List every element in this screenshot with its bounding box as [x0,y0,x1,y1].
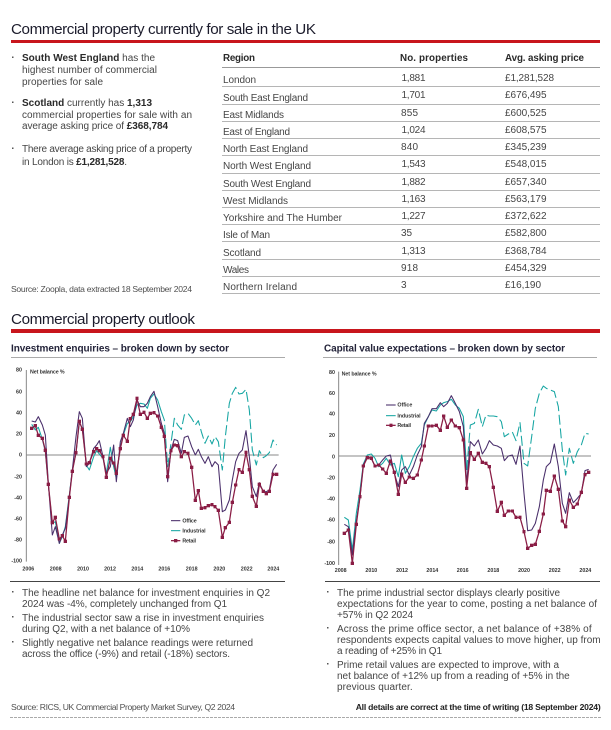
table: properties by region: Region [223,53,255,64]
line chart: investment enquiries: 2012 [104,566,116,572]
text block: for-sale key points: There average asking price of a property [22,144,192,155]
subheading: investment enquiries: Investment enquiries – broken down by sector [11,344,229,354]
line chart: investment enquiries: 2024 [267,566,279,572]
table: properties by region: 1,882 [402,177,426,188]
line chart: capital value expectations: 40 [329,412,335,418]
table: properties by region: £600,525 [505,108,547,119]
line chart: investment enquiries: -80 [14,538,22,544]
line chart: capital value expectations [324,370,591,574]
text block: investment enquiries commentary: Slightly negative net balance readings were returned [22,638,253,649]
line chart: investment enquiries: 2018 [186,566,198,572]
text block: capital value commentary: Prime retail values are expected to improve, with a [337,660,559,671]
line chart: investment enquiries: Industrial [182,528,206,534]
table: properties by region: Scotland [223,248,261,259]
table: properties by region: 35 [401,228,412,239]
table: properties by region: No. properties [400,53,469,64]
line chart: capital value expectations: 2012 [396,568,408,574]
disclaimer: All details are correct at the time of writing (18 September 2024) [356,702,601,712]
table: properties by region: 1,543 [402,159,426,170]
line chart: investment enquiries: Office [182,518,197,524]
line chart: investment enquiries: -20 [14,474,22,480]
text block: investment enquiries commentary: The headline net balance for investment enquiries in Q2 [22,588,270,599]
table: properties by region: £368,784 [505,246,547,257]
table: properties by region: Isle of Man [223,230,270,241]
table: properties by region: Wales [223,265,249,276]
subheading: capital value expectations: Capital value expectations – broken down by sector [324,344,565,354]
line chart: investment enquiries: 2014 [131,566,143,572]
line chart: capital value expectations: 2024 [579,568,591,574]
heading: commercial property outlook: Commercial property outlook [11,311,195,328]
text block: for-sale key points: highest number of commercial [22,65,157,76]
line chart: capital value expectations: -40 [327,496,335,502]
line chart: capital value expectations: 2010 [365,568,377,574]
text block: capital value commentary [327,588,601,693]
text block: capital value commentary: net balance of +12% up from a reading of +5% in the [337,671,570,682]
line chart: capital value expectations: Office [397,403,412,409]
table: properties by region: 3 [401,280,407,291]
text block: investment enquiries commentary: 2024 was -4%, completely unchanged from Q1 [22,599,227,610]
line chart: capital value expectations: 2020 [518,568,530,574]
table: properties by region: 1,227 [402,211,426,222]
line chart: investment enquiries: 80 [16,368,22,374]
line chart: investment enquiries: 2016 [158,566,170,572]
line chart: capital value expectations: 2018 [487,568,499,574]
line chart: capital value expectations: -100 [324,561,335,567]
table: properties by region [222,53,600,294]
line chart: capital value expectations: -80 [327,539,335,545]
line chart: capital value expectations: 2022 [549,568,561,574]
table: properties by region: £676,495 [505,90,547,101]
line chart: investment enquiries: 2008 [50,566,62,572]
table: properties by region: 840 [401,142,418,153]
table: properties by region: North West England [223,161,311,172]
line chart: capital value expectations: 2014 [426,568,438,574]
line chart: capital value expectations: Industrial [397,413,421,419]
table: properties by region: West Midlands [223,196,288,207]
text block: for-sale key points [12,53,192,168]
line chart: capital value expectations: -20 [327,475,335,481]
text block: capital value commentary: previous quarter. [337,682,413,693]
text block: investment enquiries commentary: during Q2, with a net balance of +10% [22,624,190,635]
line chart: capital value expectations: -60 [327,518,335,524]
line chart: investment enquiries: 2022 [241,566,253,572]
line chart: capital value expectations: 20 [329,433,335,439]
text block: capital value commentary: +57% in Q2 2024 [337,610,413,621]
line chart: investment enquiries: 2020 [213,566,225,572]
text block: capital value commentary: expectations for the year to come, posting a net balance of [337,599,597,610]
text block: for-sale key points: Scotland currently has 1,313 [22,98,152,109]
table: properties by region: £582,800 [505,228,547,239]
line chart: investment enquiries: 40 [16,410,22,416]
line chart: capital value expectations: 2008 [335,568,347,574]
table: properties by region: £548,015 [505,159,547,170]
table: properties by region: 1,024 [402,125,426,136]
source: RICS: Source: RICS, UK Commercial Property Market Survey, Q2 2024 [11,702,235,712]
table: properties by region: £16,190 [505,280,541,291]
table: properties by region: North East England [223,144,308,155]
text block: capital value commentary: respondents expects capital values to move higher, up from [337,635,601,646]
line chart: investment enquiries: -100 [11,558,22,564]
table: properties by region: Yorkshire and The Humber [223,213,343,224]
table: properties by region: £608,575 [505,125,547,136]
text block: investment enquiries commentary: across the office (-9%) and retail (-18%) sectors. [22,649,230,660]
line chart: capital value expectations: Retail [397,423,412,429]
table: properties by region: 918 [401,263,418,274]
line chart: investment enquiries: Retail [182,538,197,544]
table: properties by region: £563,179 [505,194,547,205]
line chart: investment enquiries: 60 [16,389,22,395]
table: properties by region: London [223,75,256,86]
table: properties by region: £454,329 [505,263,547,274]
line chart: investment enquiries: 20 [16,431,22,437]
line chart: capital value expectations: Net balance % [342,372,377,378]
title: commercial property for sale: Commercial property currently for sale in the UK [11,21,316,38]
table: properties by region: £657,340 [505,177,547,188]
line chart: capital value expectations: 60 [329,391,335,397]
text block: for-sale key points: properties for sale [22,77,103,88]
table: properties by region: £345,239 [505,142,547,153]
table: properties by region: 1,313 [402,246,426,257]
text block: capital value commentary: Across the prime office sector, a net balance of +38% of [337,624,592,635]
text block: for-sale key points: in London is £1,281,528. [22,157,127,168]
text block: for-sale key points: commercial properties for sale with an [22,110,192,121]
line chart: investment enquiries: 0 [19,453,22,459]
table: properties by region: Northern Ireland [223,282,297,293]
line chart: capital value expectations: 0 [332,454,335,460]
table: properties by region: 1,163 [402,194,426,205]
table: properties by region: 855 [401,108,418,119]
table: properties by region: South East England [223,93,308,104]
line chart: investment enquiries: 2010 [77,566,89,572]
text block: for-sale key points: South West England has the [22,53,155,64]
table: properties by region: East of England [223,127,290,138]
text block: capital value commentary: The prime industrial sector displays clearly positive [337,588,560,599]
line chart: investment enquiries: -60 [14,517,22,523]
line chart: investment enquiries: -40 [14,495,22,501]
table: properties by region: 1,881 [402,73,426,84]
table: properties by region: 1,701 [402,90,426,101]
line chart: investment enquiries: Net balance % [30,370,65,376]
source: Zoopla: Source: Zoopla, data extracted 18 September 2024 [11,284,192,294]
line chart: investment enquiries: 2006 [22,566,34,572]
text block: investment enquiries commentary [12,588,270,660]
text block: investment enquiries commentary: The industrial sector saw a rise in investment enquiries [22,613,264,624]
line chart: investment enquiries [11,368,279,572]
table: properties by region: East Midlands [223,110,284,121]
text block: for-sale key points: average asking price of £368,784 [22,121,168,132]
table: properties by region: South West England [223,179,311,190]
table: properties by region: £372,622 [505,211,547,222]
table: properties by region: Avg. asking price [505,53,585,64]
text block: capital value commentary: a reading of +25% in Q1 [337,646,442,657]
line chart: capital value expectations: 2016 [457,568,469,574]
table: properties by region: £1,281,528 [505,73,554,84]
line chart: capital value expectations: 80 [329,370,335,376]
